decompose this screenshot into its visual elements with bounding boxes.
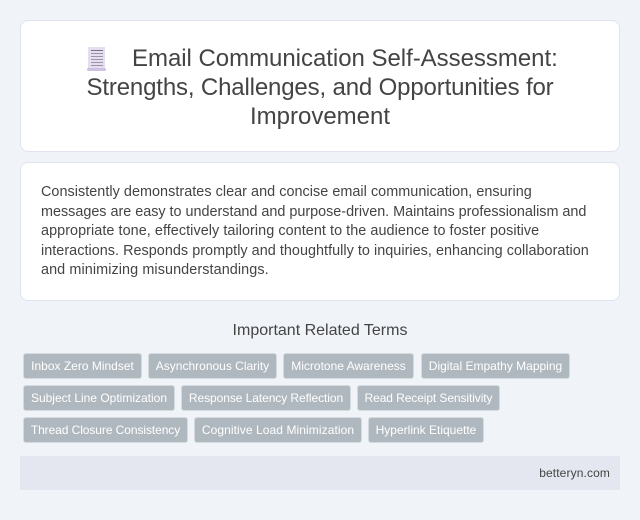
text block: summary: [41, 184, 589, 278]
tag: [421, 353, 570, 379]
tag: [23, 417, 188, 443]
panel: summary card: [20, 162, 620, 301]
tag: [194, 417, 362, 443]
title: Strengths, Challenges, and Opportunities for: [86, 74, 554, 101]
heading: related terms: Important Related Terms: [233, 322, 407, 339]
tag: [148, 353, 277, 379]
tag list: [23, 353, 570, 443]
tag: Read Receipt Sensitivity: [365, 391, 492, 405]
text block: summary: messages are easy to understand and purpose-driven. Maintains professionalism and: [41, 204, 586, 220]
title: Improvement: [250, 103, 390, 130]
tag: [368, 417, 484, 443]
tag: Cognitive Load Minimization: [202, 423, 354, 437]
tag: [181, 385, 351, 411]
footer bar: [20, 456, 620, 490]
panel: title card: [20, 20, 620, 152]
text block: summary: appropriate tone, effectively tailoring content to the audience to foster positive: [41, 223, 539, 239]
icon: document scroll: [87, 47, 106, 71]
tag: [23, 353, 142, 379]
tag: Hyperlink Etiquette: [376, 423, 476, 437]
tag: Subject Line Optimization: [31, 391, 167, 405]
text block: summary: Consistently demonstrates clear and concise email communication, ensuring: [41, 184, 532, 200]
tag: Response Latency Reflection: [189, 391, 343, 405]
text block: summary: interactions. Responds promptly and thoughtfully to inquiries, enhancing collaboration: [41, 242, 589, 258]
title: [86, 45, 558, 130]
title: Email Communication Self-Assessment:: [132, 45, 558, 72]
tag: Digital Empathy Mapping: [429, 359, 562, 373]
tag: [357, 385, 500, 411]
footer source: betteryn.com: [539, 466, 610, 480]
tag: Thread Closure Consistency: [31, 423, 180, 437]
tag: Inbox Zero Mindset: [31, 359, 134, 373]
tag: Microtone Awareness: [291, 359, 406, 373]
text block: summary: and minimizing misunderstandings.: [41, 262, 269, 278]
tag: Asynchronous Clarity: [156, 359, 269, 373]
tag: [23, 385, 175, 411]
tag: [283, 353, 414, 379]
